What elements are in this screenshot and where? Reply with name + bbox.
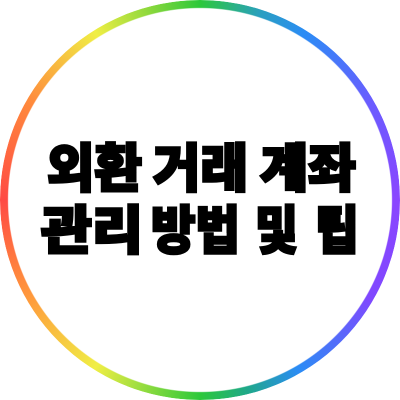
title line 1: [47, 141, 356, 199]
title line 1: 거래: [153, 141, 248, 199]
title line 1: 외환: [47, 141, 142, 199]
title line 2: 방법: [151, 203, 240, 261]
title line 2: [41, 203, 359, 261]
title line 2: 관리: [41, 203, 143, 261]
title line 1: 계좌: [260, 141, 356, 199]
title line 2: 팁: [315, 203, 359, 261]
title line 2: 및: [255, 203, 298, 261]
